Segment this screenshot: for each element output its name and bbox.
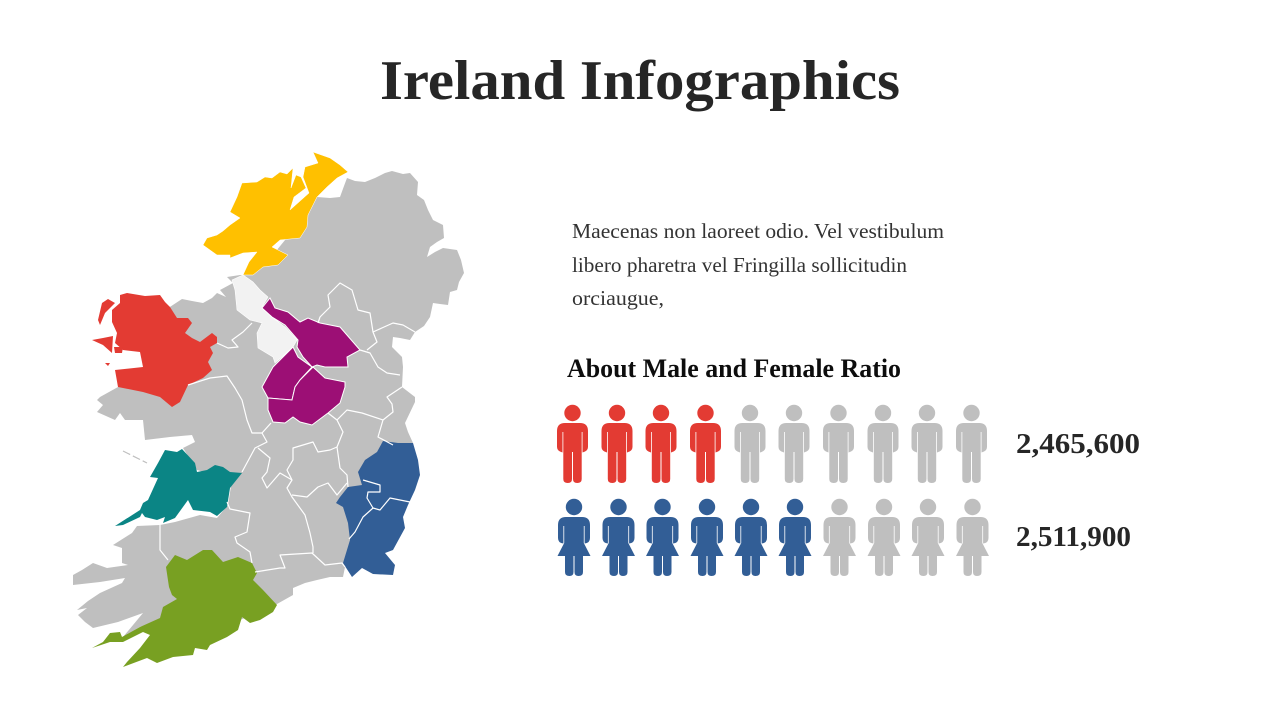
title: Ireland Infographics [380, 50, 900, 112]
map of Ireland [73, 152, 464, 667]
male count: 2,465,600 [1016, 429, 1140, 460]
island base: grey counties [73, 171, 464, 637]
ratio heading: About Male and Female Ratio [567, 354, 901, 383]
female pictogram row [558, 499, 989, 576]
body text: Maecenas non laoreet odio. Vel vestibulum [572, 219, 944, 243]
county: Donegal [203, 152, 348, 275]
body text: orciaugue, [572, 286, 664, 310]
female count: 2,511,900 [1016, 522, 1131, 553]
county: Clare [115, 449, 242, 526]
county borders [160, 283, 415, 572]
county: Cork [92, 550, 277, 667]
body text: libero pharetra vel Fringilla sollicitudin [572, 253, 907, 277]
county group: Wicklow-Wexford [336, 441, 420, 577]
male pictogram row [557, 405, 987, 483]
county: Sligo-Leitrim highlight [232, 275, 297, 363]
body text [572, 219, 944, 310]
islands: Aran [123, 451, 147, 463]
county: Mayo [92, 293, 217, 407]
county group: Cavan, Longford-Westmeath, Meath [262, 298, 360, 425]
